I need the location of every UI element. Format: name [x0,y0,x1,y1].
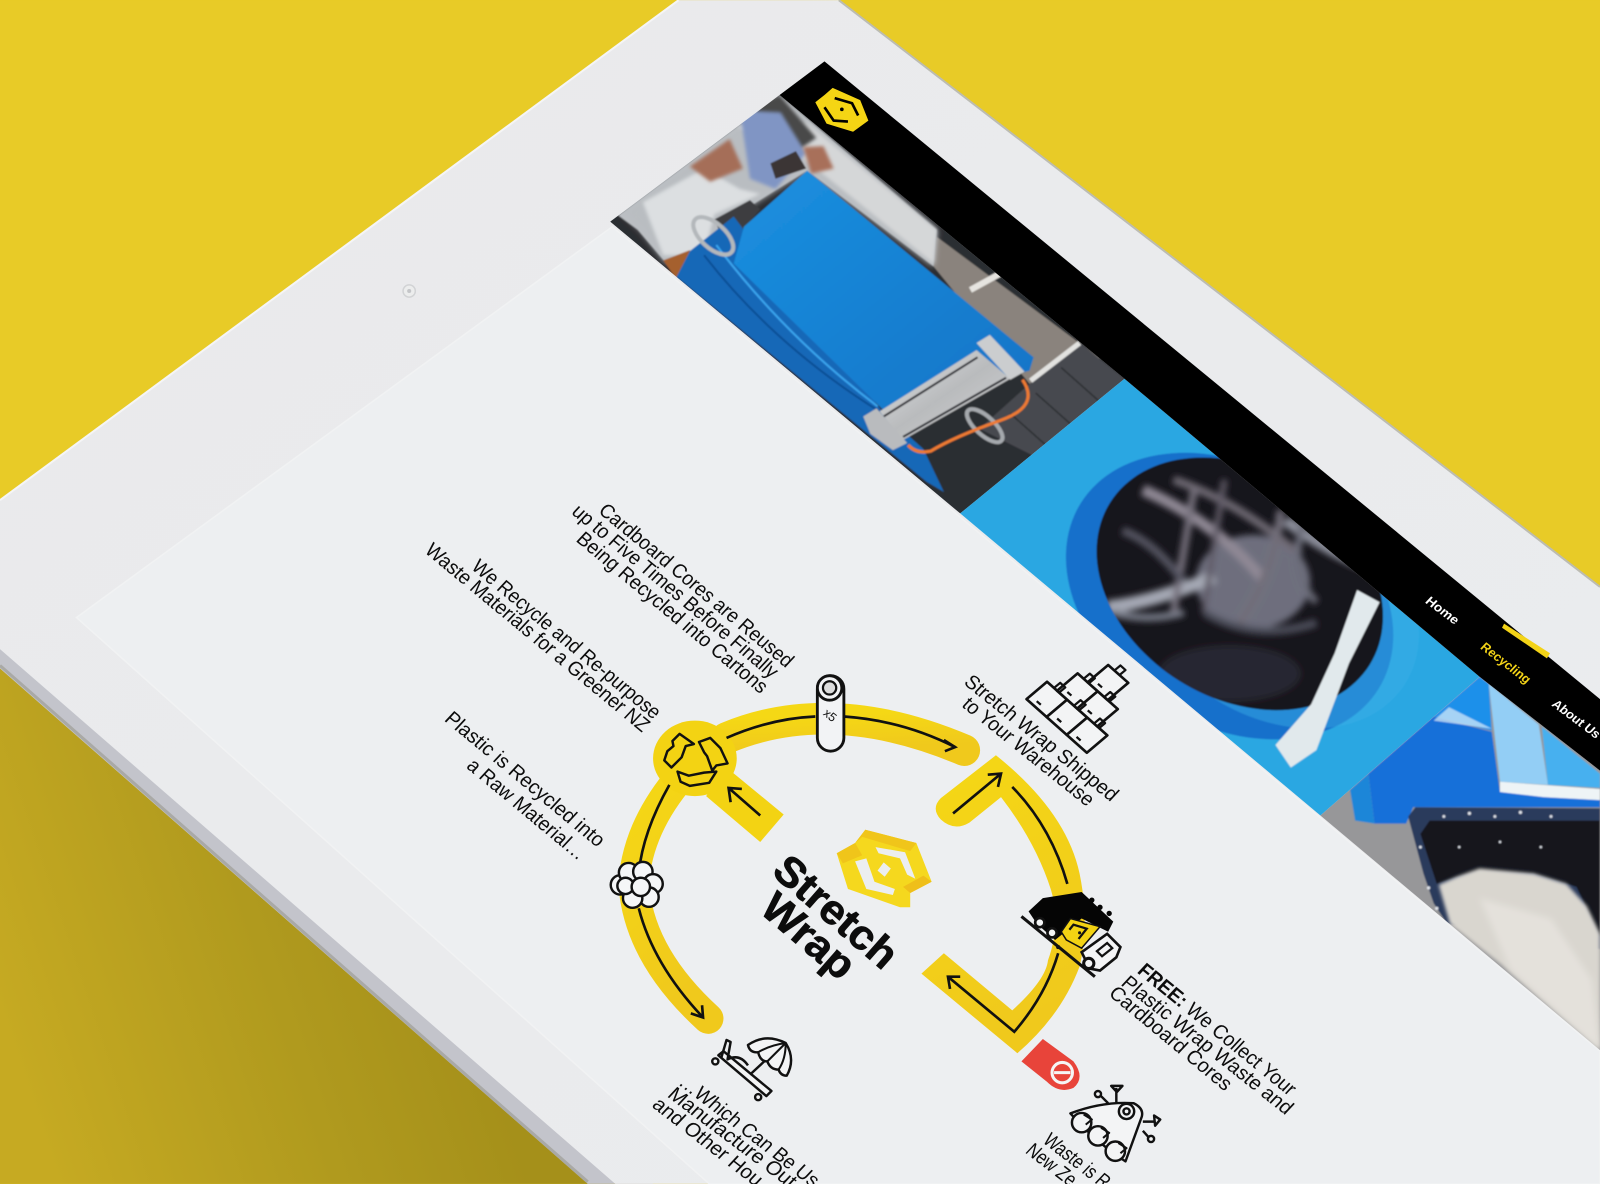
icon: collection truck [1021,892,1120,977]
caption: recycle and re-purpose: We Recycle and Re-purpose [467,556,665,724]
band: branch into recycling [706,768,784,842]
page panel [77,227,1600,1184]
central logo [837,830,932,907]
title: Stretch Wrap: Stretch [764,845,908,978]
caption: cardboard cores: Being Recycled into Cartons [572,528,772,698]
caption: free collection: FREE: We Collect Your [1133,960,1301,1100]
caption: shipped to warehouse: to Your Warehouse [957,694,1099,811]
title: Stretch Wrap: Wrap [752,883,865,988]
band: top arc [727,719,964,750]
caption: cardboard cores: up to Five Times Before Finally [567,501,783,683]
red no-landfill tab [1021,1039,1080,1090]
navigation: Home [1422,593,1463,627]
navigation [1422,593,1600,741]
icon: recycling arrows [664,734,728,786]
caption: recycle and re-purpose: Waste Materials for a Greener NZ [420,539,654,737]
caption: free collection: Cardboard Cores [1104,982,1236,1095]
navigation: Recycling [1478,639,1535,686]
caption: raw material: Plastic is Recycled into [440,708,609,852]
caption: raw material: a Raw Material… [462,755,590,865]
header logo [815,88,868,132]
cycle diagram [611,665,1160,1161]
caption: landfill waste, cut off by frame [1021,1130,1115,1184]
photo: blue bin and stretch wrap [602,87,1133,526]
caption: cardboard cores: Cardboard Cores are Reused [594,500,798,672]
photo: shredder hopper with plastic film [960,379,1480,816]
icon: landfill waste pile [1070,1086,1160,1161]
icon: stacked boxes [1027,665,1128,753]
caption: free collection: Plastic Wrap Waste and [1117,972,1297,1119]
icon: cardboard core x5 [817,676,844,751]
recycling hub [653,721,737,796]
photo: blue chute and bin of recycled pellets [1311,663,1600,1061]
band: left arc [634,776,708,1019]
icon: cotton-like raw material [611,862,663,908]
band: right bracket [921,755,1085,1053]
tablet camera [403,285,415,297]
icon: beach chair and umbrella [712,1038,791,1100]
header bar [780,61,1600,771]
flow arrows [639,716,1067,1032]
icon: cardboard core x5: x5 [821,706,840,725]
caption: shipped to warehouse: Stretch Wrap Shipped [959,671,1122,806]
